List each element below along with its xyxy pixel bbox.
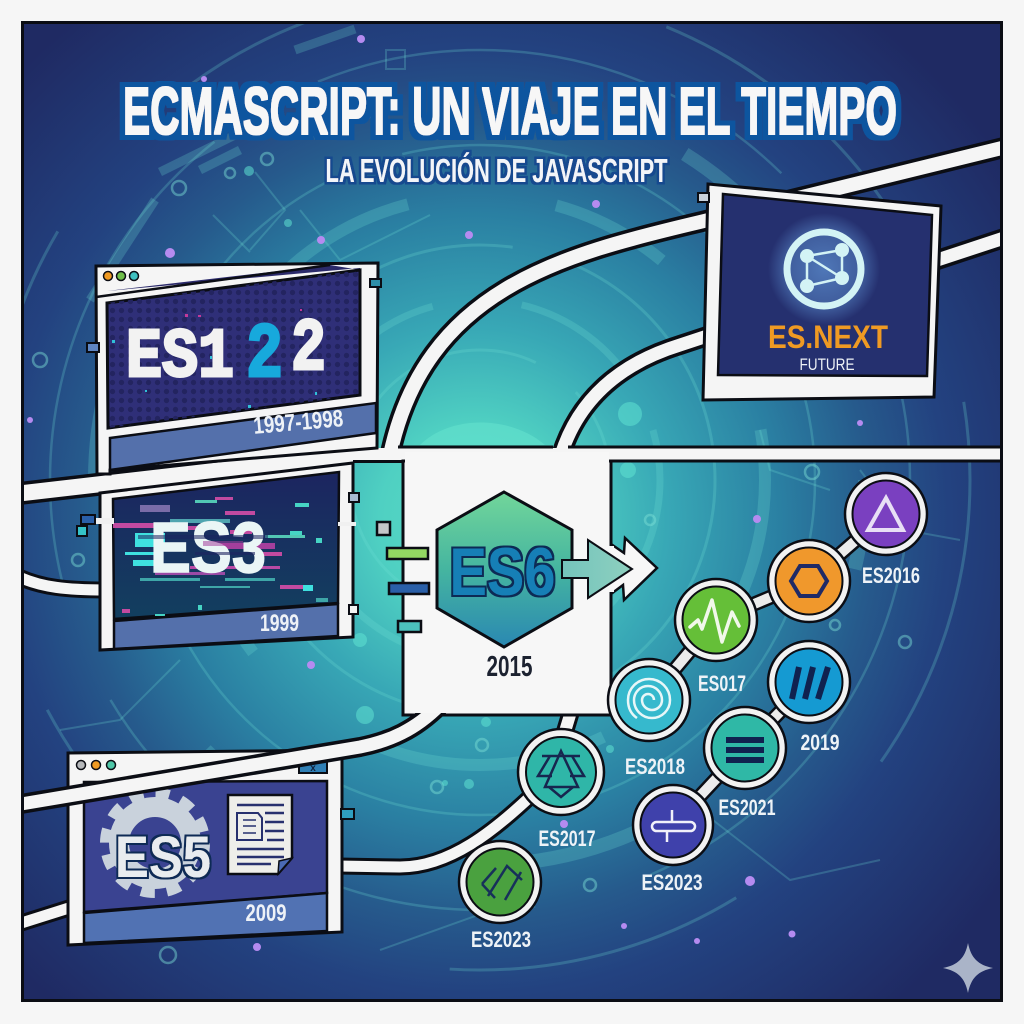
- version node: ES2016: ES2016: [862, 563, 920, 588]
- version node: ES2023 lower: ES2023: [471, 927, 531, 952]
- circuit nodes: [33, 153, 911, 963]
- panel: ES.NEXT window: [698, 184, 941, 400]
- ES1 text: 2: [291, 308, 326, 392]
- connector tab: [698, 193, 709, 202]
- ES6 hexagon: [437, 492, 572, 647]
- year 2009: 2009: [246, 900, 286, 927]
- connector tabs: [77, 493, 359, 614]
- connector tabs: [87, 279, 381, 352]
- version node: orange hexagon: [768, 540, 850, 622]
- ES6 hexagon: ES6: [450, 534, 556, 610]
- version node: ES2021: ES2021: [718, 795, 776, 820]
- ribbon: lower path to ES.NEXT: [561, 236, 1010, 455]
- ES3 text: ES3: [150, 509, 266, 588]
- panel: ES6 box: [377, 452, 657, 715]
- version node: ES2018: [608, 659, 690, 779]
- ES1 text: ES1: [126, 319, 234, 398]
- close button: [326, 273, 355, 286]
- version node: ES2017: ES2017: [538, 826, 596, 851]
- window buttons: [76, 760, 116, 770]
- small tabs: [377, 522, 429, 632]
- panel: ES5 window: [68, 750, 354, 945]
- version node: 2019: 2019: [800, 730, 840, 755]
- ES1 text: [126, 308, 326, 400]
- version node: ES2016: [845, 473, 927, 588]
- ribbon: over ES5 window: [24, 713, 446, 814]
- ES3 footer: [114, 604, 338, 649]
- version node: 2019: [768, 641, 850, 755]
- scattered purple dots: [27, 35, 863, 951]
- ES5 footer: [84, 893, 327, 943]
- version node: ES2023 lower: [459, 841, 541, 952]
- ES1 screen: [107, 270, 360, 428]
- window buttons: [104, 272, 138, 280]
- ribbon: ES5 to ES2017: [338, 795, 532, 867]
- close button: x: [310, 763, 316, 774]
- icon: gear: [105, 793, 205, 893]
- year 1999: 1999: [260, 610, 299, 637]
- subtitle: LA EVOLUCIÓN DE JAVASCRIPT: [326, 152, 668, 189]
- icon: network ring: [768, 213, 880, 325]
- ES.NEXT heading: ES.NEXT: [768, 319, 888, 355]
- connector tab: [341, 809, 354, 819]
- version node: ES2023 upper: [633, 785, 713, 895]
- version connectors: [649, 514, 886, 825]
- icon: ES6 arrow: [562, 540, 632, 598]
- ES1 footer: [110, 403, 376, 470]
- version node: ES2023 upper: ES2023: [642, 870, 702, 895]
- glitch bars: [113, 497, 328, 616]
- icon: white arrow: [611, 538, 657, 600]
- light wedge: [420, 422, 545, 445]
- ribbon: ES3 left: [15, 575, 105, 590]
- ribbon paths: [15, 146, 1016, 925]
- version node: ES2021: [704, 707, 786, 820]
- year 1997-1998: 1997-1998: [252, 405, 344, 440]
- panel: ES1 window: [87, 263, 381, 474]
- ribbon: ES5 lower left: [15, 907, 72, 925]
- year 2015: 2015: [486, 651, 532, 683]
- version node: ES017: ES017: [698, 671, 746, 696]
- ES5 text: ES5: [115, 825, 211, 890]
- ribbon: top path to ES.NEXT: [390, 146, 1010, 455]
- panel: ES3 window: [77, 463, 359, 650]
- ribbon: box to ES2017: [556, 716, 579, 730]
- ES3 screen: [113, 472, 339, 619]
- FUTURE label: FUTURE: [800, 355, 854, 374]
- close button: sX: [335, 275, 347, 285]
- close button: [299, 760, 327, 774]
- icon: document: [228, 795, 292, 874]
- ribbon: main band left: [15, 455, 353, 494]
- light dots: [244, 166, 642, 789]
- version node: ES017: [675, 579, 757, 696]
- glitch overlay: [94, 518, 356, 555]
- ES5 screen: [84, 781, 327, 912]
- ES1 text: 2: [246, 312, 283, 400]
- ribbon: main band right: [345, 447, 1016, 462]
- icon: sparkle: [943, 943, 993, 993]
- version node: ES2017: [518, 729, 604, 851]
- version node: ES2018: ES2018: [625, 754, 685, 779]
